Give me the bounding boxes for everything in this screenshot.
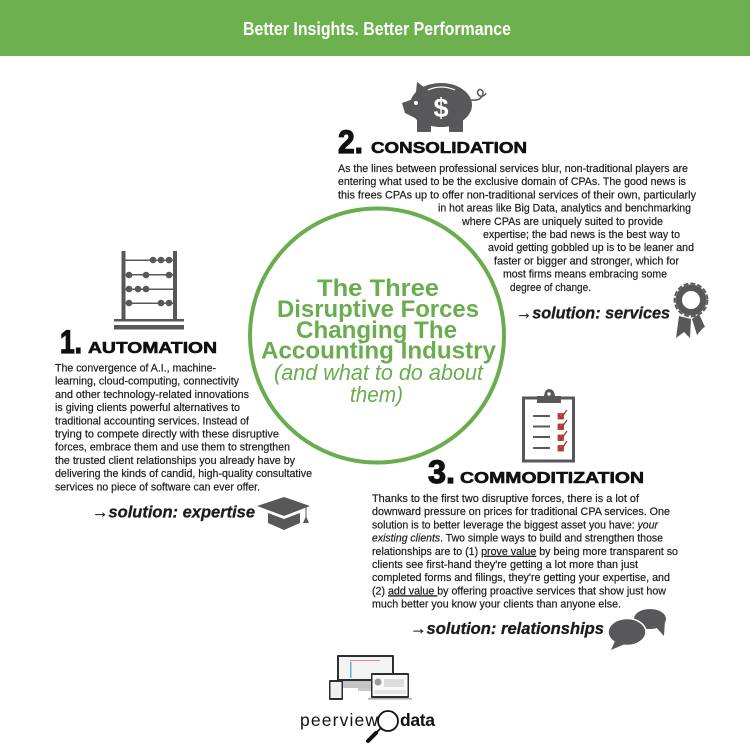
body text: consolidation: avoid getting gobbled up is to be leaner and [488,242,694,254]
wordmark: data [400,710,435,730]
body text: consolidation: where CPAs are uniquely suited to provide [461,216,663,228]
center circle with title [250,208,504,462]
body text: consolidation: in hot areas like Big Data, analytics and benchmarking [438,203,691,215]
icon: abacus [114,251,184,330]
heading: consolidation: CONSOLIDATION [371,140,527,157]
heading: consolidation: 2. [338,124,363,160]
body text: consolidation: most firms means embracing some [503,269,667,281]
heading: automation [60,324,217,360]
body text: commoditization: clients see first-hand they're getting a lot more than just [372,559,638,571]
solution: services: →solution: services [516,304,670,322]
section 3: commoditization [372,454,678,638]
wordmark [300,710,435,730]
solution: expertise: →solution: expertise [92,502,255,522]
body text: commoditization [372,493,678,611]
center circle with title: them) [350,382,403,407]
body text: commoditization: solution is to better leverage the biggest asset you have: your [372,519,659,531]
body text: consolidation: this frees CPAs up to offer non-traditional services of their own, particularly [338,189,696,201]
wordmark: peerview [300,710,378,730]
body text: consolidation: faster or bigger and stronger, which for [494,255,679,267]
body text: consolidation: expertise; the bad news is the best way to [483,229,680,241]
body text: commoditization: much better you know your clients than anyone else. [372,599,621,611]
body text: commoditization: existing clients. Two simple ways to build and strengthen those [372,533,663,545]
body text: consolidation [338,163,696,294]
body text: automation: learning, cloud-computing, connectivity [55,376,239,388]
body text: commoditization: relationships are to (1) prove value by being more transparent so [372,546,678,558]
heading: commoditization: COMMODITIZATION [460,470,644,487]
icon: clipboard checklist [524,389,574,461]
solution: relationships: →solution: relationships [410,619,604,638]
heading: commoditization [428,454,644,490]
icon: award ribbon [674,284,708,338]
heading: automation: AUTOMATION [88,340,217,357]
body text: automation: and other technology-related innovations [55,389,249,401]
body text: automation: traditional accounting services. Instead of [55,415,250,427]
icon: magnifying glass [368,711,398,741]
header banner [0,0,750,56]
body text: commoditization: downward pressure on prices for traditional CPA services. One [372,506,670,518]
center circle with title: Disruptive Forces [277,296,479,323]
header banner: Better Insights. Better Performance [243,19,511,39]
logo: peerview data [300,655,435,741]
body text: automation: trying to compete directly with these disruptive [55,428,279,440]
body text: commoditization: Thanks to the first two disruptive forces, there is a lot of [372,493,640,505]
center circle with title: (and what to do about [274,360,484,385]
body text: consolidation: As the lines between professional services blur, non-traditional players are [338,163,688,175]
heading: commoditization: 3. [428,454,455,490]
body text: automation: The convergence of A.I., machine- [55,362,216,374]
heading: consolidation [338,124,527,160]
icon: piggy bank [402,82,486,132]
body text: automation: delivering the kinds of candid, high-quality consultative [55,468,312,480]
center circle with title: The Three [317,275,439,302]
section 2: consolidation [338,124,696,322]
icon: piggy bank: $ [433,93,449,123]
body text: automation [55,362,312,493]
body text: commoditization: (2) add value by offering proactive services that show just how [372,585,666,597]
body text: consolidation: degree of change. [510,282,591,294]
body text: automation: services no piece of software can ever offer. [55,481,260,493]
body text: automation: the trusted client relationships you already have by [55,455,295,467]
icon: graduation cap [257,497,310,530]
body text: automation: forces, embrace them and use them to strengthen [55,442,290,454]
section 1: automation [55,324,312,522]
body text: consolidation: entering what used to be the exclusive domain of CPAs. The good news is [338,176,686,188]
icon: speech bubbles [608,609,666,650]
center circle with title: Accounting Industry [261,338,497,364]
body text: commoditization: completed forms and filings, they're getting your expertise, and [372,572,670,584]
center circle with title: Changing The [296,317,457,344]
body text: automation: is giving clients powerful alternatives to [55,402,240,414]
heading: automation: 1. [60,324,82,360]
device mockups [329,655,412,700]
